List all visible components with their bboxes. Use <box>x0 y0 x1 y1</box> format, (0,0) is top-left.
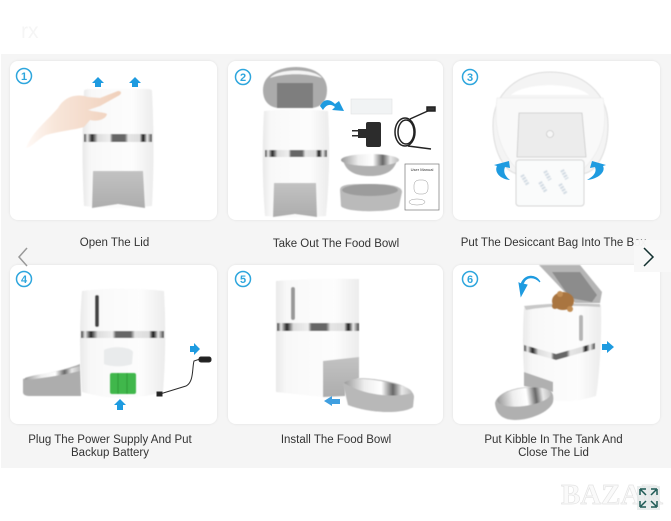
user manual <box>405 164 439 210</box>
steel bowl <box>23 364 81 396</box>
caption 2: Take Out The Food Bowl <box>273 238 399 250</box>
caption 5: Install The Food Bowl <box>281 434 391 446</box>
caption 1: Open The Lid <box>80 237 149 249</box>
step number 1 <box>16 68 32 84</box>
adapter <box>352 122 381 147</box>
gray bowl <box>340 184 402 211</box>
step number 5: 5 <box>240 274 246 286</box>
step number 4 <box>16 272 32 286</box>
expand icon <box>637 486 660 510</box>
step number 2: 2 <box>240 72 246 84</box>
bowl <box>495 384 553 420</box>
panel 1: open the lid <box>10 61 217 220</box>
caption 4: Backup Battery <box>71 447 149 459</box>
feeder body <box>263 110 329 218</box>
previous chevron <box>19 248 27 266</box>
ghost logo: rx <box>21 20 39 43</box>
usb cable <box>395 107 435 149</box>
panel 4: power and battery <box>10 265 217 424</box>
bowl <box>343 378 414 412</box>
watermark: BAZAR <box>561 479 664 511</box>
step number 2 <box>236 70 250 84</box>
panel 3: desiccant bag <box>453 61 660 220</box>
arrow right <box>602 341 614 353</box>
step number 4: 4 <box>21 274 28 286</box>
caption 6: Close The Lid <box>518 447 589 459</box>
caption 6: Put Kibble In The Tank And <box>484 434 623 446</box>
next chevron button <box>634 240 671 272</box>
open lid <box>263 67 327 108</box>
panel 2: take out the food bowl <box>228 61 443 220</box>
feeder <box>80 288 165 398</box>
step number 3: 3 <box>467 72 473 84</box>
blue arrow <box>320 100 344 111</box>
feeder <box>82 89 154 208</box>
desiccant tray <box>516 160 584 206</box>
desiccant bag <box>351 99 392 114</box>
steel bowl <box>341 154 399 176</box>
caption 3: Put The Desiccant Bag Into The Box <box>461 237 647 249</box>
step number 6 <box>462 272 478 286</box>
step number 3 <box>462 70 478 84</box>
feeder <box>523 303 601 401</box>
curved arrow <box>519 276 540 296</box>
step number 5 <box>236 272 250 286</box>
gray background band <box>1 54 671 468</box>
user manual: User Manual <box>411 167 433 172</box>
kibble <box>552 291 574 312</box>
lid interior <box>493 72 608 174</box>
step number 6: 6 <box>467 274 473 286</box>
tilted lid <box>539 265 602 303</box>
feeder <box>276 279 359 397</box>
arrows <box>114 343 200 410</box>
panel 5: install bowl <box>228 265 443 424</box>
arrows up <box>92 77 141 87</box>
battery <box>110 373 136 394</box>
step number 1: 1 <box>21 71 27 83</box>
arrow <box>324 396 340 406</box>
power cable <box>157 357 211 396</box>
hand <box>26 91 121 148</box>
panel 6: kibble <box>453 265 660 424</box>
caption 4: Plug The Power Supply And Put <box>28 434 193 446</box>
curved arrows <box>494 161 606 180</box>
